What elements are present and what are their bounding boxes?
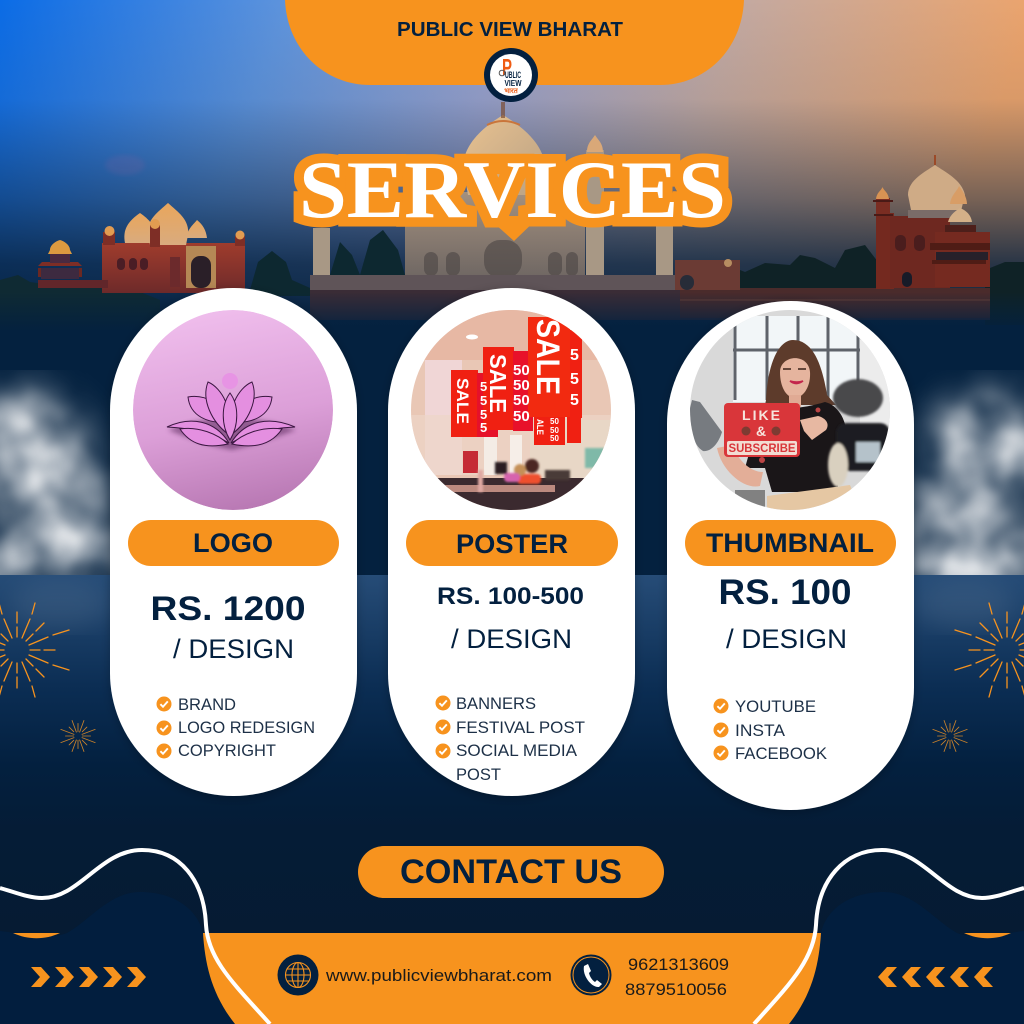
contact us button: CONTACT US [400,853,622,891]
label: THUMBNAIL [685,520,896,566]
list: logo features [156,695,315,760]
label: LOGO [128,520,339,566]
chevrons right [878,967,993,987]
image: sale banners: SALE [453,378,472,424]
illustration: Taj Mahal skyline [0,102,1024,332]
table [767,485,860,510]
navy lower background [0,325,1024,1024]
Taj main building [405,192,585,278]
image: creator with sign [690,310,890,510]
phone numbers [625,955,729,999]
Taj minarets [313,150,673,288]
image: sale banners: 5 [480,379,487,394]
small gate [675,259,740,290]
image: sale banners: 50 [550,417,559,426]
dress [745,402,846,492]
image: creator with sign: SUBSCRIBE [728,441,796,455]
price: poster: RS. 100-500 [437,583,584,610]
list: thumbnail features [714,697,828,763]
image: sale banners: 50 [513,362,530,379]
cloud reflections [10,580,1015,630]
panel: logo [110,288,357,796]
Taj big dome [463,115,545,195]
left pavilion [38,240,108,288]
footer band [0,850,1024,1024]
sky background [0,0,1024,330]
image: sale banners: 5 [570,347,579,364]
clouds left [0,370,110,575]
top banner [285,0,744,85]
unit: poster: / DESIGN [451,624,572,654]
unit: logo: / DESIGN [173,634,294,664]
image: creator with sign: & [756,423,766,439]
Taj platform [310,275,675,295]
left red mosque [102,203,245,293]
panel: thumbnail [667,301,914,810]
list: poster features: BANNERS [456,694,536,713]
heading: SERVICES: SERVICES [299,144,726,235]
list: thumbnail features: YOUTUBE [735,697,816,716]
brand logo: VIEW [504,79,522,88]
list: thumbnail features: INSTA [735,721,786,740]
dark fade over wall [0,292,1024,332]
face [780,358,810,398]
Taj minaret top [587,135,603,152]
camera [828,379,890,487]
list: logo features: BRAND [178,695,236,714]
image: sale banners: 5 [480,393,487,408]
list: poster features: FESTIVAL POST [456,718,585,737]
arm [717,445,763,487]
image: sale banners: 50 [550,426,559,435]
central trees [250,230,405,296]
icon: phone [570,954,612,996]
right red mosque [873,155,990,289]
icon: globe [278,954,318,996]
right crescent [964,933,1011,938]
image: sale banners: 5 [480,420,487,435]
price: thumbnail: RS. 100 [718,573,852,612]
image: creator with sign: LIKE [742,407,780,423]
brand logo: P [502,54,512,80]
list: thumbnail features: FACEBOOK [735,744,828,763]
brand logo: भारत [504,88,519,95]
label: POSTER [406,520,618,566]
image: sale banners: 50 [513,377,530,394]
contact us button [358,846,664,898]
price: logo: RS. 1200 [150,590,306,628]
image: sale banners: 5 [480,407,487,422]
phone numbers: 8879510056 [625,980,727,999]
left white curve [0,850,270,1024]
image: sale banners: SALE [530,319,566,395]
image: sale banners: SALE [485,354,511,413]
image: lotus logo [133,310,333,510]
phone numbers: 9621313609 [628,955,729,974]
label: LOGO: LOGO [193,528,273,558]
list: logo features: COPYRIGHT [178,741,276,760]
list: logo features: LOGO REDESIGN [178,718,315,737]
panel: poster [388,288,635,796]
right wave panel [789,892,1024,1024]
image: sale banners [411,310,611,510]
Long red wall [310,290,990,320]
image: sale banners: 50 [550,434,559,443]
hair [765,340,836,405]
left treeline [0,275,160,330]
label: POSTER: POSTER [456,529,568,559]
list: poster features: SOCIAL MEDIA [456,741,578,760]
list: poster features [436,694,585,784]
right white curve [754,850,1024,1024]
image: sale banners: 50 [513,392,530,409]
brand logo: UBLIC [505,70,521,80]
label: THUMBNAIL: THUMBNAIL [706,528,874,558]
sign [724,403,800,457]
lamp [690,400,722,451]
image: sale banners: 5 [570,371,579,388]
fireworks [0,603,1024,752]
website: www.publicviewbharat.com [325,966,552,985]
clouds right [914,370,1024,575]
chevrons left [31,967,146,987]
brand title: PUBLIC VIEW BHARAT [397,19,623,41]
image: sale banners: 5 [570,392,579,409]
list: poster features: POST [456,765,501,784]
unit: thumbnail: / DESIGN [726,624,847,654]
far right trees [715,245,1024,325]
image: sale banners: 50 [513,408,530,425]
left wave panel [0,892,235,1024]
image: sale banners: ALE [535,419,545,435]
brand logo [484,48,538,102]
left crescent [13,933,60,938]
